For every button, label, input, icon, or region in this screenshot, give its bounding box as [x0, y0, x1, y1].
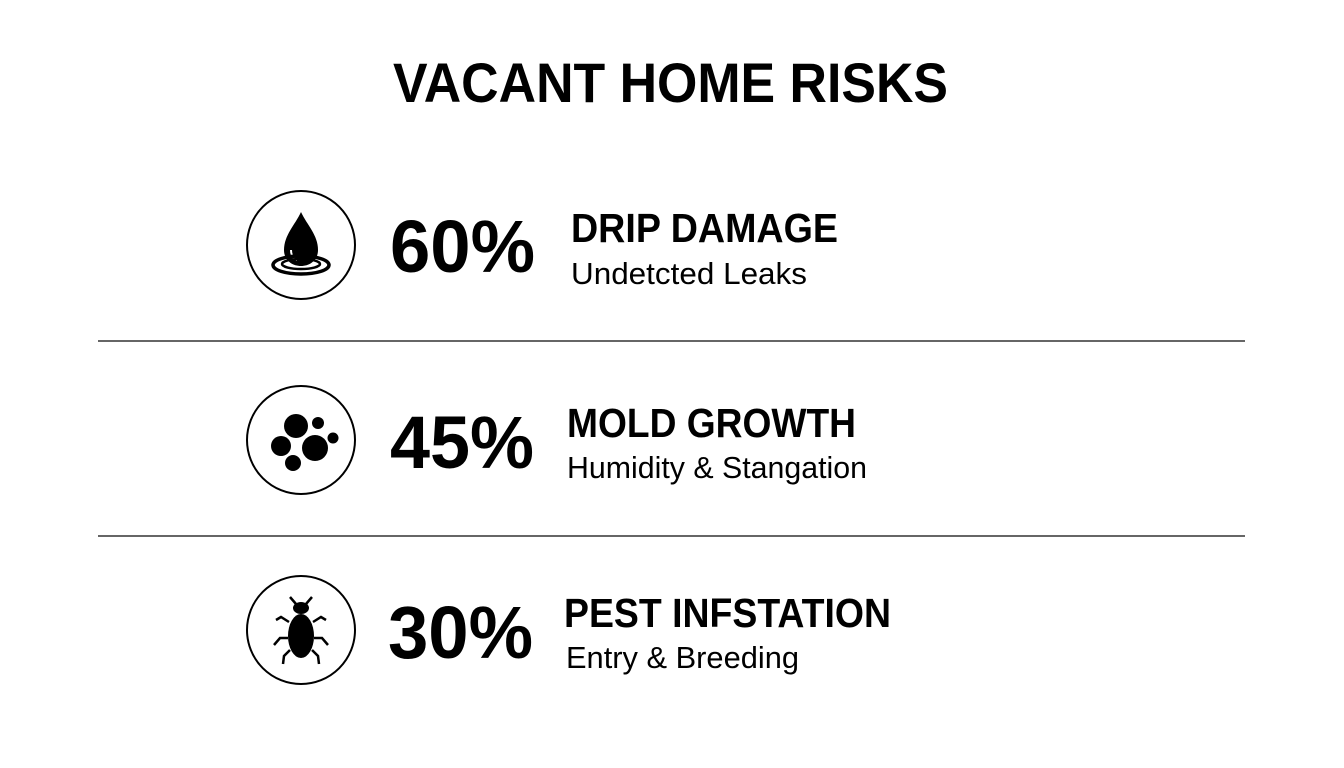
subtitle: Undetcted Leaks	[571, 256, 807, 291]
stat 45%: 45%	[390, 401, 534, 484]
title: VACANT HOME RISKS	[393, 51, 948, 114]
stat 30%: 30%	[388, 591, 533, 674]
row: mold growth	[247, 386, 867, 494]
row: drip damage	[247, 191, 838, 299]
heading: DRIP DAMAGE	[571, 205, 838, 251]
stat 60%: 60%	[390, 205, 535, 288]
icon: beetle	[247, 576, 355, 684]
heading: MOLD GROWTH	[567, 400, 856, 446]
heading: PEST INFSTATION	[564, 590, 891, 636]
icon: water drop	[247, 191, 355, 299]
subtitle: Entry & Breeding	[566, 640, 799, 675]
row: pest infestation	[247, 576, 891, 684]
icon: mold spores	[247, 386, 355, 494]
subtitle: Humidity & Stangation	[567, 450, 867, 485]
